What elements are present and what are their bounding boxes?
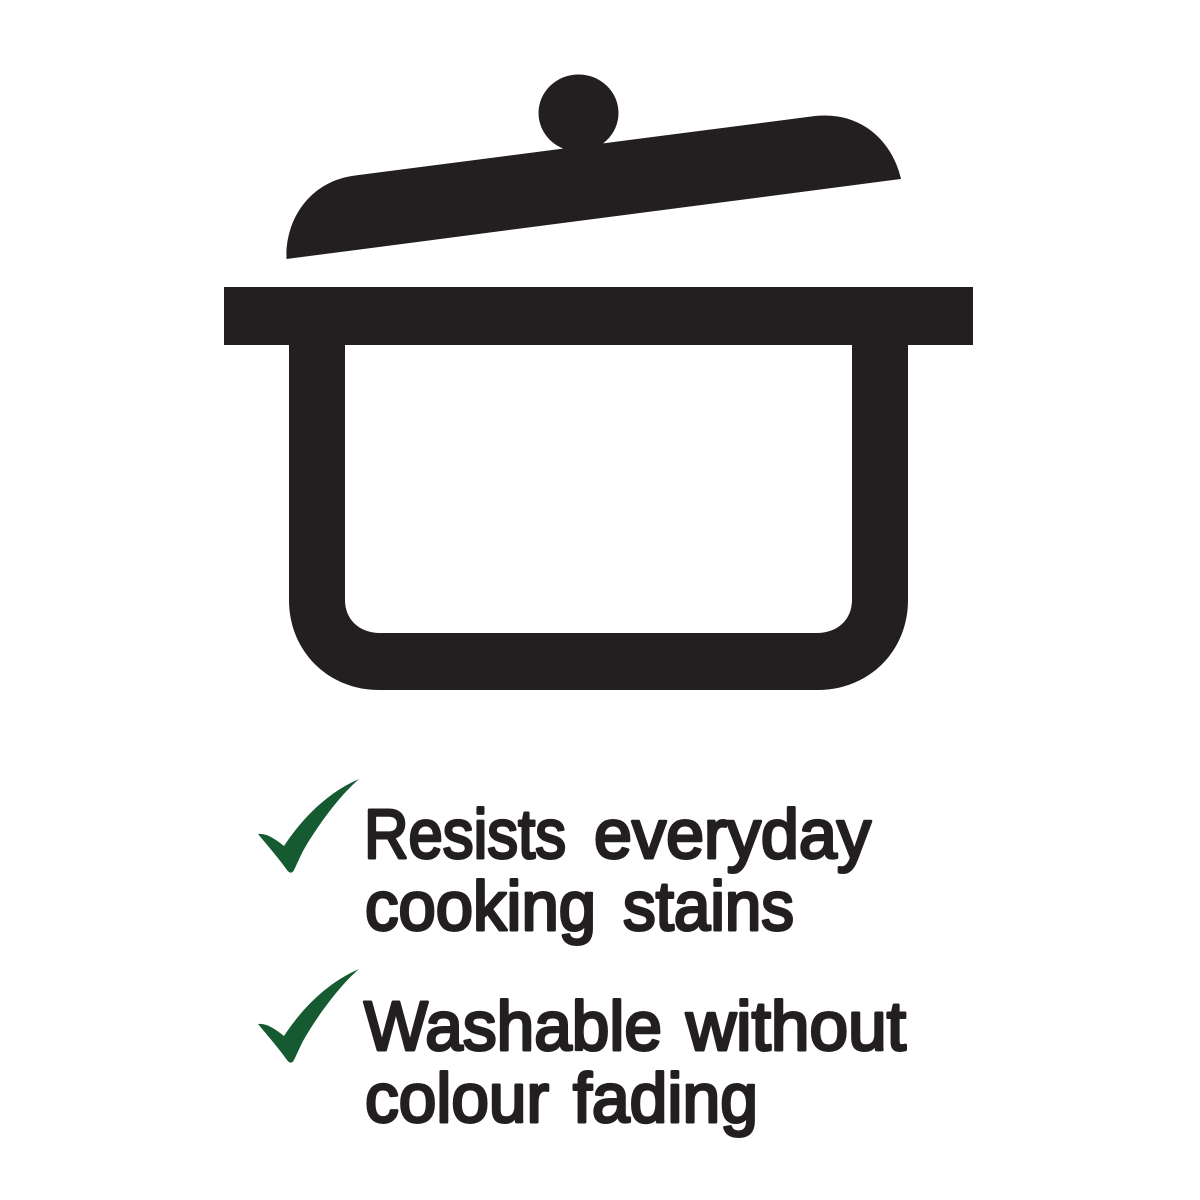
- text: washable without colour fading: without: [685, 987, 906, 1065]
- icon: green check mark: [258, 779, 359, 873]
- text: resists everyday cooking stains: [364, 795, 871, 945]
- feature: resists stains: [258, 779, 871, 945]
- pot lid knob: [538, 74, 618, 152]
- feature: washable: [258, 969, 906, 1137]
- pot rim: [224, 287, 973, 345]
- text: resists everyday cooking stains: cooking: [365, 867, 596, 945]
- text: resists everyday cooking stains: Resists: [364, 795, 566, 873]
- text: washable without colour fading: fading: [573, 1059, 758, 1137]
- icon: green check mark: [258, 969, 359, 1063]
- text: resists everyday cooking stains: stains: [623, 867, 794, 945]
- icon: cooking pot: [224, 74, 973, 690]
- pot lid: [286, 115, 901, 259]
- pot body: [289, 340, 908, 690]
- text: washable without colour fading: [364, 987, 906, 1137]
- text: washable without colour fading: Washable: [364, 987, 662, 1065]
- text: resists everyday cooking stains: everyday: [594, 795, 871, 873]
- text: washable without colour fading: colour: [365, 1059, 549, 1137]
